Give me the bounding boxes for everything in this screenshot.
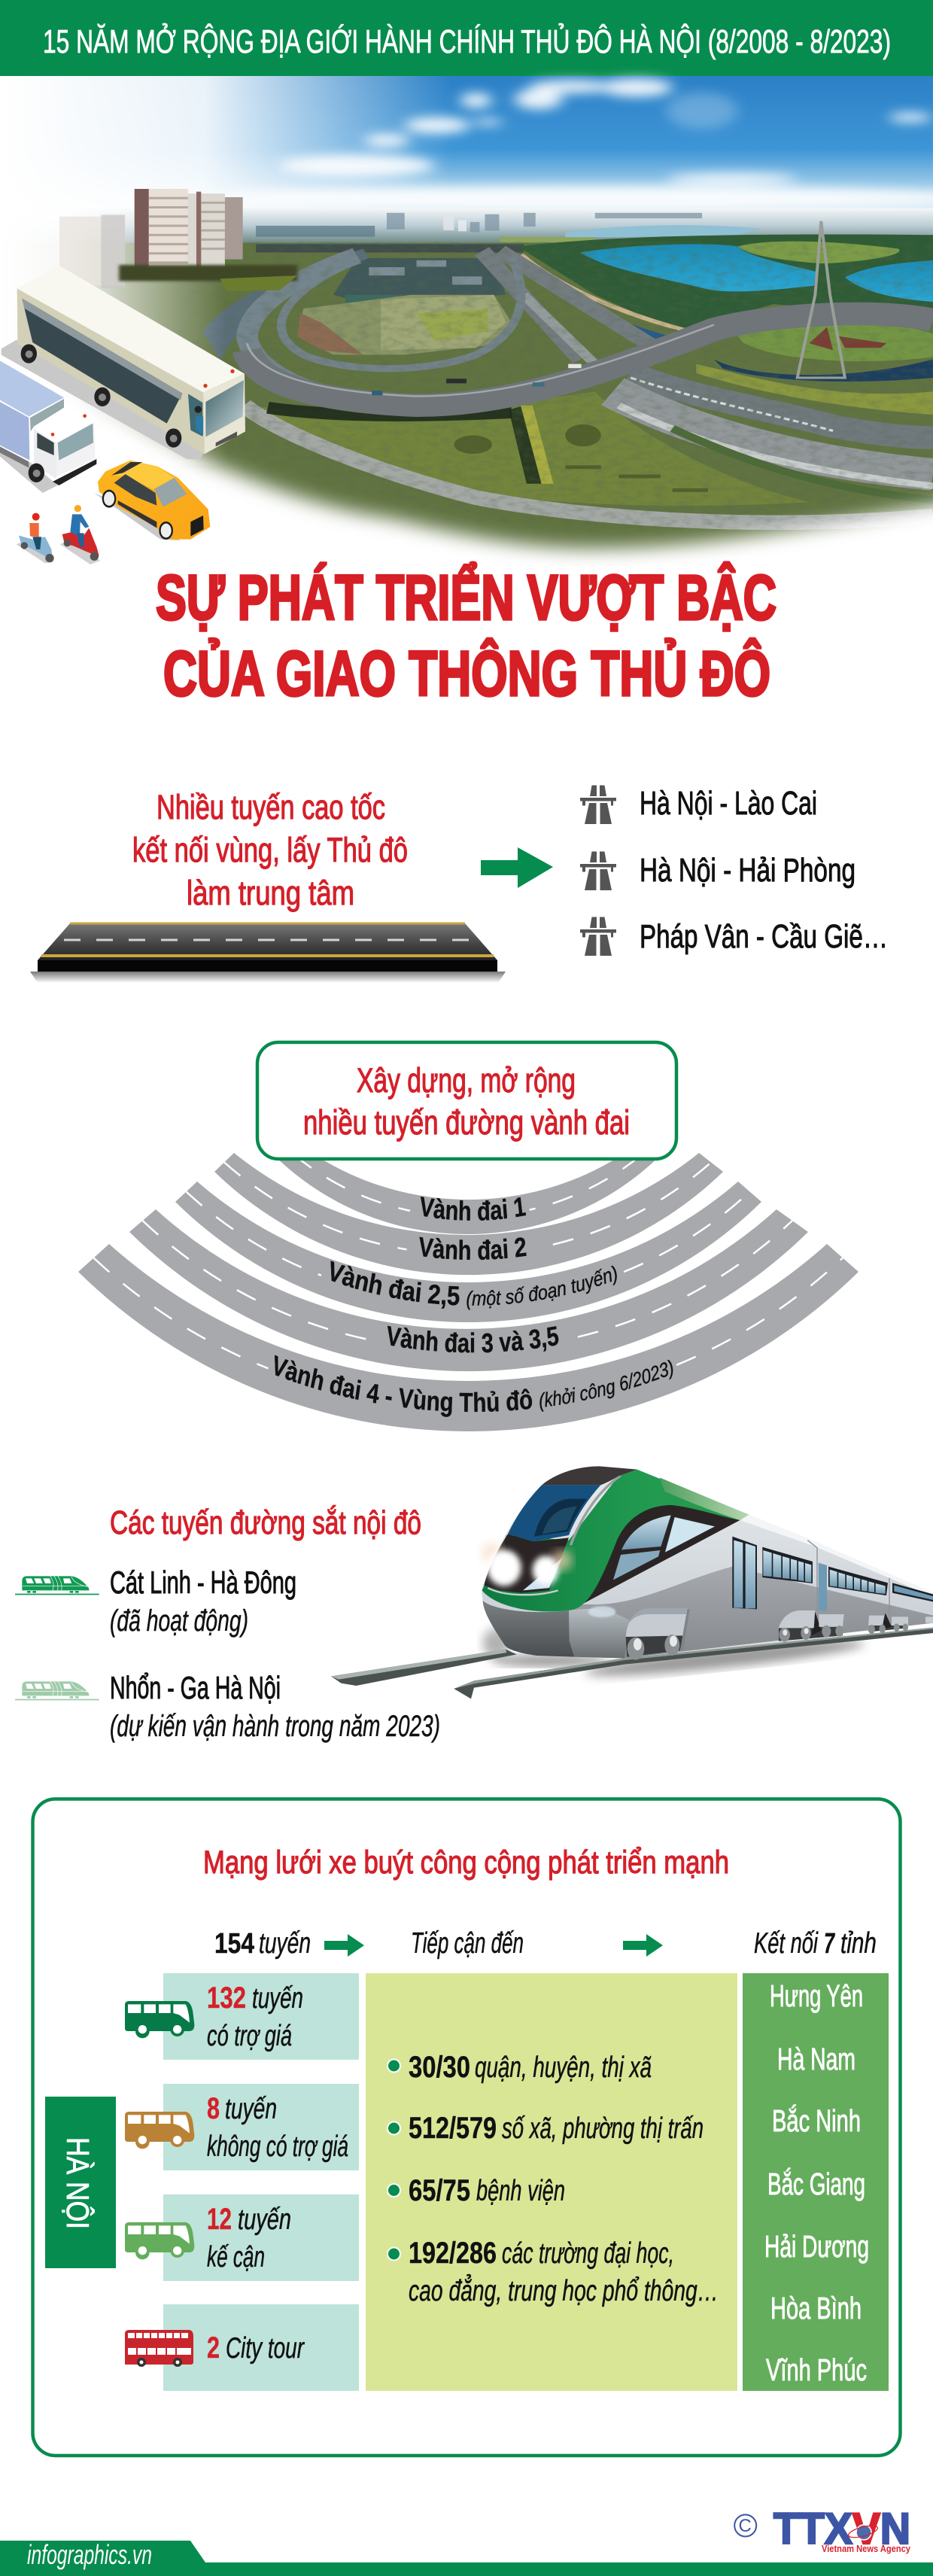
access list panel	[366, 1973, 737, 2391]
railway line: Nhổn - Ga Hà Nội	[15, 1670, 440, 1743]
face	[484, 1534, 569, 1593]
bullet	[387, 2051, 652, 2084]
road illustration	[30, 923, 506, 983]
expressway list	[580, 785, 888, 956]
row: adjacent routes: kế cận	[207, 2241, 265, 2273]
icon: yellow car	[94, 461, 210, 540]
green livery	[482, 1470, 749, 1611]
bullet: 192/286	[409, 2237, 497, 2270]
bullet: 30/30	[409, 2051, 470, 2084]
ring roads diagram	[78, 1153, 859, 1431]
arrow	[481, 847, 553, 888]
text: expressway intro: Nhiều tuyến cao tốc	[157, 788, 385, 826]
row: adjacent routes	[125, 2194, 359, 2281]
bullet	[387, 2237, 719, 2307]
provinces panel: Bắc Giang	[767, 2167, 865, 2201]
tree texture	[178, 242, 933, 560]
row: subsidized routes	[125, 1973, 359, 2060]
railway line: Nhổn - Ga Hà Nội: (dự kiến vận hành trong năm 2023)	[110, 1710, 440, 1743]
railway line: Cát Linh - Hà Đông	[15, 1565, 296, 1638]
icon: highway	[580, 852, 616, 890]
railway line: Cát Linh - Hà Đông: (đã hoạt động)	[110, 1604, 248, 1638]
fade to white along bottom	[0, 323, 933, 617]
lower carriageways	[631, 373, 933, 438]
hero aerial photo of interchange	[0, 76, 933, 617]
ring road 3 and 3.5	[129, 1209, 808, 1371]
callout: ring roads heading	[257, 1042, 676, 1159]
TTXVN logo: TTXVN	[773, 2505, 910, 2553]
rails	[331, 1650, 517, 1686]
provinces panel: Hòa Bình	[770, 2291, 862, 2325]
urban railway heading: Các tuyến đường sắt nội đô	[110, 1504, 421, 1541]
bullet: cao đẳng, trung học phổ thông…	[409, 2274, 719, 2307]
provinces panel	[743, 1973, 889, 2391]
roof and windscreen	[542, 1466, 637, 1485]
main title	[156, 562, 776, 709]
row: city tour: 2	[207, 2331, 220, 2365]
bullet	[387, 2174, 565, 2207]
provinces panel: Bắc Ninh	[772, 2103, 861, 2138]
callout: ring roads heading: nhiều tuyến đường vành đai	[303, 1103, 630, 1142]
column header: routes: 154	[214, 1928, 254, 1960]
railway line: Cát Linh - Hà Đông: Cát Linh - Hà Đông	[110, 1565, 296, 1600]
Hà Nội tag	[45, 2097, 116, 2268]
train illustration	[331, 1466, 933, 1699]
bullet: số xã, phường thị trấn	[502, 2112, 704, 2145]
ground	[0, 235, 933, 567]
vehicles on road	[372, 364, 582, 395]
icon: bus	[2, 266, 245, 459]
icon: brown bus	[125, 2112, 194, 2149]
route: Hà Nội - Hải Phòng: Hà Nội - Hải Phòng	[640, 852, 856, 889]
text: expressway intro: kết nối vùng, lấy Thủ đô	[132, 831, 408, 869]
ring road 2	[214, 1153, 723, 1275]
column header: provinces: 7	[824, 1928, 835, 1960]
arrow	[324, 1934, 364, 1957]
row: city tour: City tour	[226, 2332, 305, 2365]
footer bar: infographics.vn	[27, 2539, 152, 2570]
icon: red double-decker bus	[125, 2330, 193, 2367]
route: Hà Nội - Lào Cai: Hà Nội - Lào Cai	[640, 785, 817, 822]
row: city tour	[125, 2304, 359, 2391]
ring road 1	[280, 1160, 655, 1234]
bogies	[626, 1626, 908, 1657]
body	[482, 1466, 933, 1658]
icon: light green bus	[125, 2222, 194, 2259]
text: expressway intro	[132, 788, 408, 912]
left fade	[0, 207, 226, 465]
footer bar	[0, 2539, 933, 2576]
bullet: bệnh viện	[476, 2175, 565, 2207]
transport vehicle illustration	[0, 266, 245, 564]
column header: routes	[214, 1927, 311, 1960]
bullet: 65/75	[409, 2174, 470, 2207]
flyover	[268, 408, 512, 415]
ring road 3 and 3.5: Vành đai 3 và 3,5	[387, 1326, 558, 1353]
text: expressway intro: làm trung tâm	[187, 874, 354, 912]
ring road 2.5: Vành đai 2,5 (một số đoạn tuyến)	[330, 1261, 617, 1309]
column header: provinces: Kết nối	[754, 1927, 819, 1960]
road works block and buildings	[333, 258, 506, 304]
ring road 4: Vành đai 4 - Vùng Thủ đô (khởi công 6/2023)	[275, 1355, 673, 1417]
bullet	[387, 2112, 704, 2145]
icon: scooter riders	[17, 505, 100, 564]
icon: train green	[15, 1576, 99, 1595]
bullet: các trường đại học,	[502, 2237, 674, 2270]
provinces panel: Hà Nam	[777, 2042, 856, 2076]
row: subsidized routes: tuyến	[252, 1982, 303, 2015]
TTXVN logo: C	[739, 2516, 752, 2536]
header bar	[0, 0, 933, 76]
shadows	[584, 1634, 865, 1682]
ring road 2: Vành đai 2	[419, 1237, 527, 1260]
provinces panel: Hải Dương	[764, 2229, 869, 2264]
arrow	[623, 1934, 663, 1957]
icon: highway	[580, 917, 616, 956]
icon: green bus	[125, 2001, 194, 2038]
TTXVN logo: Vietnam News Agency	[822, 2544, 910, 2554]
fields	[238, 391, 809, 506]
row: adjacent routes: tuyến	[238, 2203, 291, 2236]
ring road 2.5	[175, 1182, 761, 1322]
column header: access: Tiếp cận đến	[411, 1927, 524, 1960]
column header: routes: tuyến	[259, 1927, 311, 1960]
panel: bus network	[33, 1799, 900, 2456]
column header: provinces: tỉnh	[840, 1927, 877, 1960]
icon: train pale	[15, 1681, 99, 1700]
cab side windows	[585, 1505, 740, 1603]
railway line: Nhổn - Ga Hà Nội: Nhổn - Ga Hà Nội	[110, 1670, 281, 1705]
Hà Nội tag: HÀ NỘI	[60, 2137, 96, 2229]
panel title: Mạng lưới xe buýt công cộng phát triển mạnh	[203, 1845, 729, 1881]
provinces panel: Hưng Yên	[770, 1978, 863, 2013]
ring road 1: Vành đai 1	[420, 1197, 527, 1221]
bullet: quận, huyện, thị xã	[475, 2051, 652, 2084]
highway strands	[482, 251, 667, 360]
ring road 4	[78, 1244, 859, 1431]
icon: truck	[0, 360, 96, 493]
row: unsubsidized routes: 8	[207, 2092, 220, 2125]
apartment towers	[59, 189, 297, 291]
bullet: 512/579	[409, 2112, 497, 2145]
row: adjacent routes: 12	[207, 2203, 232, 2236]
row: unsubsidized routes: tuyến	[225, 2093, 277, 2125]
row: unsubsidized routes	[125, 2084, 359, 2170]
row: subsidized routes: có trợ giá	[207, 2020, 292, 2052]
callout: ring roads heading: Xây dựng, mở rộng	[357, 1061, 576, 1099]
doors and windows	[732, 1537, 757, 1609]
row: subsidized routes: 132	[207, 1981, 246, 2015]
row: unsubsidized routes: không có trợ giá	[207, 2130, 348, 2163]
provinces panel: Vĩnh Phúc	[766, 2352, 867, 2387]
icon: highway	[580, 786, 616, 824]
pylon	[798, 221, 845, 378]
